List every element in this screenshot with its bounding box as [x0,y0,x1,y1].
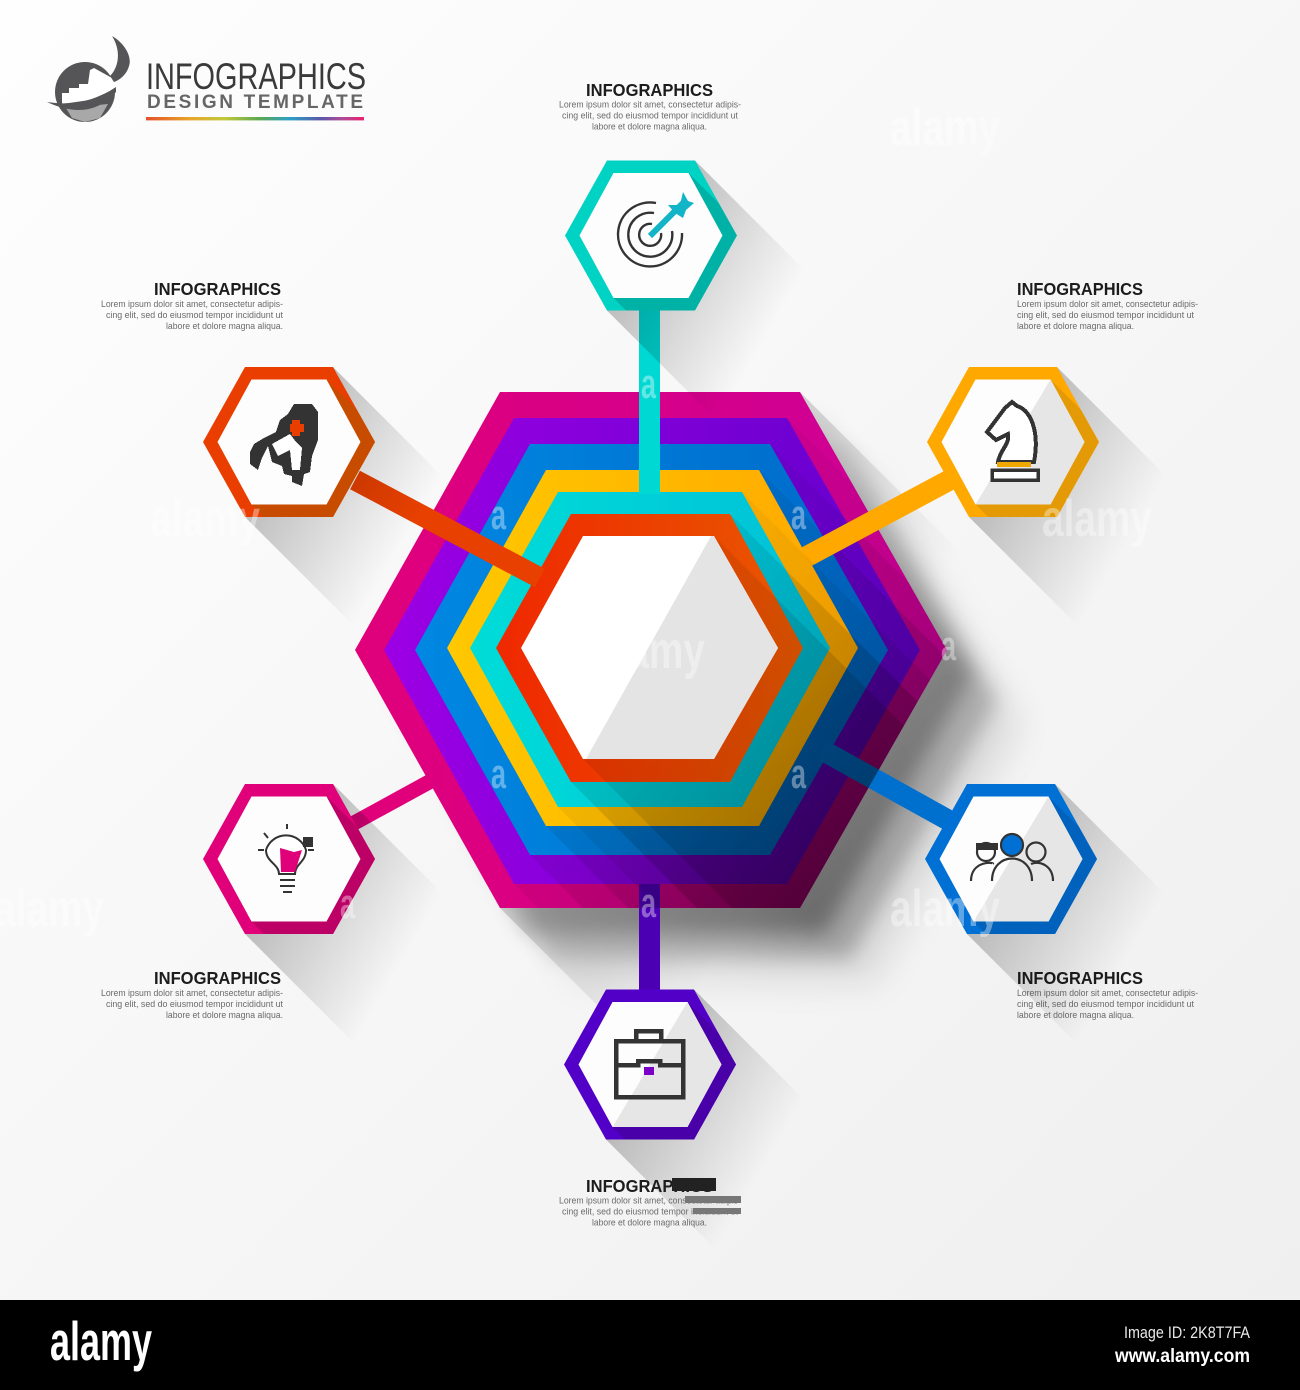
connector: teal [639,300,660,494]
text block: lower right: Lorem ipsum dolor sit amet, consectetur adipis- [1017,988,1198,998]
watermarks: alamy [890,99,1000,157]
connector: purple [639,884,660,992]
icon: briefcase [616,1031,683,1097]
ring: red [496,514,803,782]
text block: bottom: Lorem ipsum dolor sit amet, consectetur adipis- [559,1196,741,1206]
text block: lower right [1017,968,1198,1020]
text block: upper right: labore et dolore magna aliqua. [1017,321,1134,331]
ring: blue [415,444,888,855]
text block: upper left: Lorem ipsum dolor sit amet, consectetur adipis- [101,299,283,309]
watermarks: alamy [595,622,705,680]
text block: top [559,80,741,132]
ring: magenta [355,392,947,908]
text block: top: cing elit, sed do eiusmod tempor incididunt ut [562,110,739,120]
hexagon node: red rocket [203,367,443,627]
watermarks: a [491,491,506,538]
ring: purple [384,418,920,884]
icon: target with arrow [618,192,694,266]
watermarks: a [340,880,355,927]
text block: upper left: labore et dolore magna aliqua. [166,321,283,331]
hexagon node: magenta bulb [203,784,443,1044]
text block: upper left [101,279,284,331]
text block: lower left: INFOGRAPHICS [154,968,281,988]
header subtitle: DESIGN TEMPLATE [147,92,363,113]
text block: upper right [1017,279,1198,331]
connector: magenta [345,776,440,828]
watermarks: a [791,491,806,538]
ring: yellow [447,470,858,826]
text block: lower right: labore et dolore magna aliqua. [1017,1010,1134,1020]
text block: upper right: Lorem ipsum dolor sit amet, consectetur adipis- [1017,299,1198,309]
text block: lower left: cing elit, sed do eiusmod tempor incididunt ut [106,999,284,1009]
hexagon node: orange knight [927,367,1167,627]
hexagon node: teal target [565,160,805,420]
icon: light bulb [258,824,314,892]
text block: upper right: cing elit, sed do eiusmod tempor incididunt ut [1017,310,1195,320]
connector: blue [822,750,948,820]
watermarks: alamy [150,490,260,548]
connector: red [355,480,540,578]
watermarks: a [491,750,506,797]
connector: orange [806,476,957,557]
footer logo: alamy [50,1310,152,1372]
watermarks: a [641,879,656,926]
text block: upper left: cing elit, sed do eiusmod tempor incididunt ut [106,310,284,320]
text block: lower left: labore et dolore magna aliqua. [166,1010,283,1020]
text block: bottom: labore et dolore magna aliqua. [592,1218,707,1228]
text block: upper right: INFOGRAPHICS [1017,279,1143,299]
center hexagon shade [586,536,778,759]
text block: bottom: INFOGRAPHICS [586,1176,713,1196]
icon: rocket [250,404,318,486]
header title: INFOGRAPHICS [146,56,366,97]
text block: bottom: cing elit, sed do eiusmod tempor incididunt ut [562,1206,739,1216]
text block: bottom [559,1176,741,1228]
icon: chess knight [987,402,1038,480]
rainbow bar [146,117,364,120]
image id: Image ID: 2K8T7FA [1124,1324,1250,1342]
hexagon node: blue people [925,784,1165,1044]
text block: top: Lorem ipsum dolor sit amet, consectetur adipis- [559,100,741,110]
text block: top: INFOGRAPHICS [586,80,713,100]
footer bar [0,1300,1300,1390]
watermarks: a [641,360,656,407]
text block: upper left: INFOGRAPHICS [154,279,281,299]
header logo and title [47,36,366,122]
text block: lower left [101,968,284,1020]
icon: people group [971,834,1053,881]
hexagon node: purple briefcase [564,990,804,1250]
watermarks: a [941,622,956,669]
central concentric hexagons [350,310,954,990]
text block: lower left: Lorem ipsum dolor sit amet, consectetur adipis- [101,988,283,998]
icon: logo mark [47,36,130,122]
website: www.alamy.com [1114,1346,1250,1367]
watermarks [0,99,1152,938]
ring: teal [470,492,830,807]
central hexagon shadow [380,392,1022,1068]
watermarks: alamy [890,880,1000,938]
text block: lower right: cing elit, sed do eiusmod tempor incididunt ut [1017,999,1195,1009]
text block: lower right: INFOGRAPHICS [1017,968,1143,988]
center hexagon [521,536,778,759]
watermarks: a [791,750,806,797]
watermarks: alamy [1042,490,1152,548]
text block: top: labore et dolore magna aliqua. [592,122,707,132]
